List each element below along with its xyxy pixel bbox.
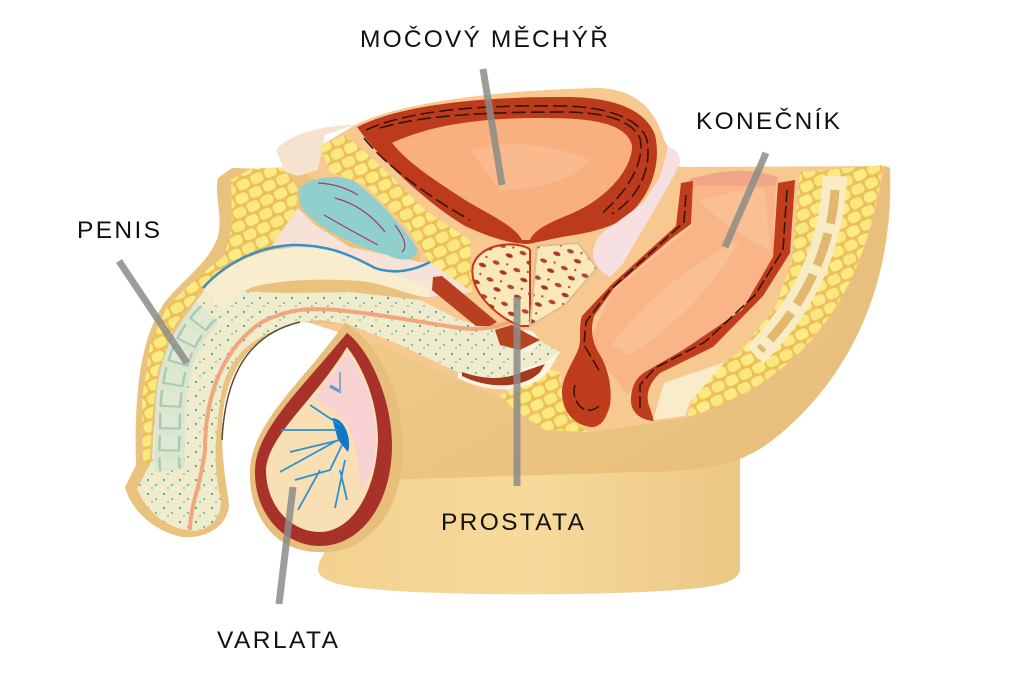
pale tissue top: [272, 125, 472, 297]
prostate: [472, 243, 597, 326]
sacral fat layer: [653, 165, 883, 420]
label: KONEČNÍK: [696, 107, 841, 247]
rectal lumen: [590, 176, 776, 395]
label: MOČOVÝ MĚCHÝŘ: MOČOVÝ MĚCHÝŘ: [360, 25, 608, 53]
rectal wall back: [631, 180, 795, 421]
testis ducts: [332, 418, 349, 452]
rectal wall front: [562, 181, 693, 427]
seminal vesicle: [593, 147, 680, 277]
epididymis: [312, 352, 376, 490]
red bar: [432, 276, 497, 326]
section plate: [280, 88, 884, 433]
rectum: [562, 171, 795, 427]
urethra: [190, 309, 510, 530]
label: PENIS: PENIS: [77, 217, 160, 244]
pedestal: [318, 440, 740, 594]
corpus squares: [169, 313, 208, 470]
label: PROSTATA: PROSTATA: [441, 509, 585, 536]
scrotum: [250, 322, 403, 552]
label: VARLATA: [217, 487, 339, 654]
model body: [355, 166, 890, 480]
pubic bone: [299, 177, 418, 260]
penis interior: [137, 290, 560, 531]
penile cream bar: [203, 245, 430, 310]
penis outer shell: [125, 168, 420, 537]
label: PENIS: [77, 217, 187, 363]
bladder: [357, 97, 657, 244]
label: VARLATA: VARLATA: [217, 627, 339, 654]
yellow lower fat: [500, 370, 588, 432]
label: MOČOVÝ MĚCHÝŘ: [360, 25, 608, 185]
fat behind bladder: [320, 135, 472, 292]
penile bulb: [458, 325, 560, 389]
bladder lumen: [392, 118, 632, 240]
label: KONEČNÍK: KONEČNÍK: [696, 107, 841, 135]
upper fat layer: [142, 167, 298, 463]
